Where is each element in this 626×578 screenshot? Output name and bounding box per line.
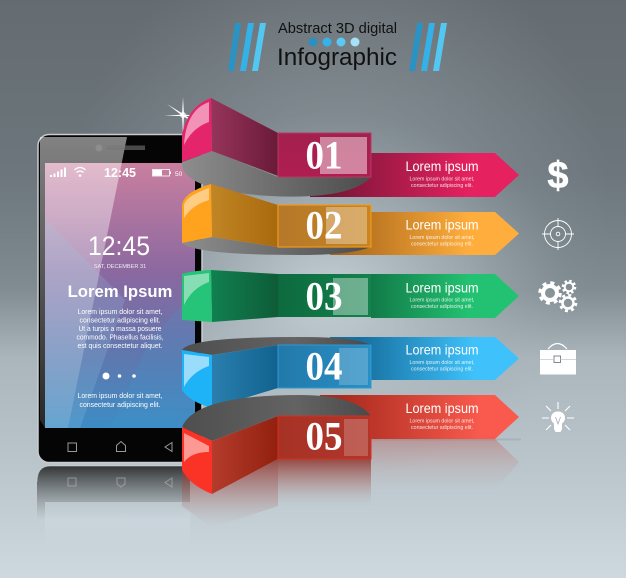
number block 04 <box>278 344 371 388</box>
number block 02 <box>278 202 371 248</box>
number block 02: 02 <box>306 202 342 248</box>
right stripes <box>409 23 447 71</box>
arrow text 01: Lorem ipsum <box>406 159 478 174</box>
screen footer text: Lorem ipsum dolor sit amet, <box>78 391 162 400</box>
number block 05 <box>278 414 371 459</box>
screen paragraph: commodo. Phasellus facilisis, <box>76 332 164 342</box>
cap 03 <box>182 270 212 322</box>
arrow text 04 <box>406 342 478 372</box>
arrow 03 <box>371 274 519 318</box>
status bar: 12:45 <box>104 166 136 180</box>
arrow text 05: consectetur adipiscing elit. <box>411 425 473 431</box>
cap 01 <box>182 98 212 162</box>
arrow text 05 <box>406 401 478 431</box>
left stripes <box>228 23 266 71</box>
underside 02 <box>182 237 371 255</box>
arrow text 02 <box>406 218 478 248</box>
screen footer text <box>78 391 162 409</box>
heading: Infographic: Infographic <box>277 44 397 71</box>
arrow 02 <box>330 212 519 255</box>
sparkle <box>164 97 202 135</box>
icon: dollar: $ <box>547 155 569 197</box>
screen paragraph: Lorem ipsum dolor sit amet, <box>78 307 162 316</box>
title dots <box>308 38 360 46</box>
icon: gears <box>540 281 576 311</box>
icon: target <box>542 218 574 250</box>
phone screen <box>45 163 195 428</box>
status bar: 50 <box>175 171 183 178</box>
number block 01: 01 <box>306 132 342 178</box>
cap 05 <box>182 427 212 494</box>
underside 01 <box>182 151 371 197</box>
number block 03 <box>278 274 371 318</box>
side face 01 <box>211 98 278 176</box>
cap 04 <box>182 350 212 408</box>
phone body <box>38 134 202 462</box>
arrow text 01: consectetur adipiscing elit. <box>411 183 473 189</box>
icon: light bulb <box>542 402 574 432</box>
side face 05 <box>212 416 278 494</box>
phone reflection <box>37 466 190 547</box>
arrow 05 <box>320 395 519 439</box>
ribbon 01 <box>182 98 519 197</box>
number block 04: 04 <box>306 344 342 388</box>
top surface 04 <box>182 337 371 355</box>
arrow text 02: Lorem ipsum <box>406 218 478 232</box>
ribbon 04 <box>182 337 519 408</box>
arrow text 04: consectetur adipiscing elit. <box>411 366 473 372</box>
arrow text 03: Lorem ipsum <box>406 280 478 296</box>
arrow 04 <box>330 337 519 380</box>
floor reflection of ribbon 05 <box>182 438 521 528</box>
number block 01 <box>278 132 371 178</box>
arrow text 02: consectetur adipiscing elit. <box>411 242 473 248</box>
arrow text 05: Lorem ipsum dolor sit amet, <box>410 418 475 424</box>
screen footer text: consectetur adipiscing elit. <box>80 400 160 409</box>
arrow text 03 <box>406 280 478 310</box>
status bar <box>50 166 183 180</box>
ribbon 02 <box>182 184 519 255</box>
phone camera and speaker <box>96 144 145 152</box>
screen shine <box>40 137 195 428</box>
side face 04 <box>212 345 278 408</box>
title block <box>228 21 447 71</box>
arrow text 05: Lorem ipsum <box>406 401 478 416</box>
arrow 01 <box>310 153 519 197</box>
screen paragraph: est quis consectetur aliquet. <box>78 341 162 350</box>
top surface 05 <box>182 395 371 441</box>
cap 02 <box>182 184 212 243</box>
arrow text 04: Lorem ipsum dolor sit amet, <box>410 360 475 366</box>
screen paragraph <box>76 307 164 350</box>
smartphone <box>38 134 202 462</box>
arrow text 02: Lorem ipsum dolor sit amet, <box>410 235 475 241</box>
side face 02 <box>211 184 278 247</box>
date: SAT, DECEMBER 31 <box>94 264 146 270</box>
screen heading: Lorem Ipsum <box>68 282 172 301</box>
arrow text 04: Lorem ipsum <box>406 342 478 358</box>
number block 05: 05 <box>306 414 342 458</box>
navigation buttons <box>68 442 172 452</box>
side face 03 <box>211 270 278 322</box>
arrow text 01 <box>406 159 478 189</box>
heading: Abstract 3D digital: Abstract 3D digital <box>278 21 397 37</box>
pagination dots <box>102 372 136 380</box>
arrow text 03: Lorem ipsum dolor sit amet, <box>410 298 475 304</box>
icon: briefcase <box>540 344 576 374</box>
screen paragraph: Ut a turpis a massa posuere <box>78 324 162 333</box>
screen paragraph: consectetur adipiscing elit. <box>80 316 160 324</box>
arrow text 03: consectetur adipiscing elit. <box>411 304 473 310</box>
ribbon 03 <box>182 270 519 322</box>
number block 03: 03 <box>306 274 342 318</box>
ribbon 05 <box>182 395 519 494</box>
arrow text 01: Lorem ipsum dolor sit amet, <box>410 176 475 182</box>
clock: 12:45 <box>88 231 150 261</box>
